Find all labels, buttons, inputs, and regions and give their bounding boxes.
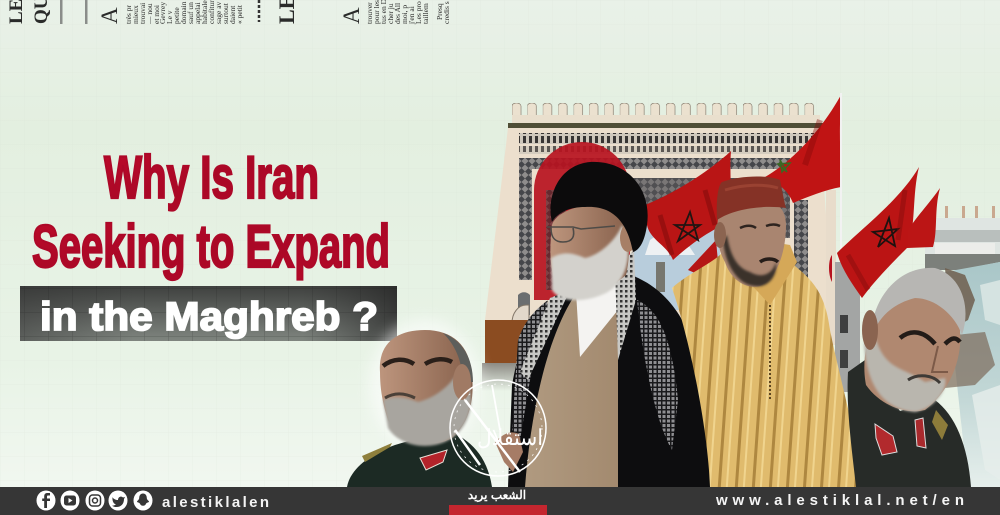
newsprint strip along the top edge: appelai — [193, 2, 202, 24]
subtitle bar: in the Maghreb ? — [40, 295, 378, 339]
newsprint strip along the top edge: habitale — [200, 0, 209, 24]
gate: Moroccan palace facade — [482, 103, 860, 392]
flag behind the turban — [645, 151, 731, 260]
newsprint strip along the top edge: Le v — [165, 10, 174, 24]
newsprint strip along the top edge: domain — [179, 1, 188, 24]
newsprint strip along the top edge: j'en ai — [407, 6, 416, 25]
newsprint strip along the top edge: mieux — [131, 5, 140, 24]
newsprint strip along the top edge: et moi — [152, 5, 161, 24]
Moroccan flags — [645, 93, 940, 298]
newsprint strip along the top edge: Gevrey — [158, 2, 167, 24]
newsprint strip along the top edge: petite — [172, 7, 181, 24]
newsprint strip along the top edge: A — [339, 7, 364, 24]
newsprint strip along the top edge: credis s — [442, 1, 451, 24]
newsprint strip along the top edge: daient — [228, 5, 237, 24]
newsprint strip along the top edge: trouver — [365, 2, 374, 24]
title: first two lines — [32, 144, 390, 280]
newsprint strip along the top edge — [6, 0, 451, 25]
newsprint strip along the top edge: moi, p — [400, 5, 409, 24]
newsprint strip along the top edge: très pr — [124, 5, 133, 24]
handle: alestiklalen — [162, 494, 269, 511]
newsprint strip along the top edge: « petit — [235, 4, 244, 24]
social icons — [36, 490, 152, 510]
title: first two lines: Seeking to Expand — [32, 213, 390, 280]
newsprint strip along the top edge: Les pro — [414, 1, 423, 24]
newsprint strip along the top edge: — nou — [145, 3, 154, 25]
subtitle bar — [20, 286, 397, 341]
logo: watermark seal — [450, 380, 546, 476]
coastal scene at the right — [925, 206, 1000, 487]
newsprint strip along the top edge: cher ju — [386, 3, 395, 24]
newsprint strip along the top edge: trouvai — [138, 3, 147, 24]
newsprint strip along the top edge: A — [97, 7, 122, 24]
figure: right commander — [848, 268, 971, 487]
newsprint strip along the top edge: sauf un — [186, 2, 195, 24]
slogan: الشعب يريد — [468, 488, 526, 503]
newsprint strip along the top edge: confitur — [207, 0, 216, 24]
footer bar — [0, 487, 1000, 515]
newsprint strip along the top edge: surtout — [221, 2, 230, 24]
flag above the right figure — [837, 167, 919, 298]
figure: left commander — [347, 319, 492, 487]
newsprint strip along the top edge: sage av — [214, 1, 223, 24]
website: www.alestiklal.net/en — [715, 492, 964, 509]
figure: centre cleric — [495, 162, 712, 487]
logo: watermark seal: استقلال — [477, 425, 543, 450]
newsprint strip along the top edge: pour les — [372, 0, 381, 24]
small flag behind the king — [688, 240, 718, 273]
narrow flag far right — [907, 188, 940, 248]
newsprint strip along the top edge: taillem — [421, 3, 430, 24]
newsprint strip along the top edge: des All — [393, 3, 402, 24]
red accent tab — [449, 505, 547, 515]
newsprint strip along the top edge: Presq — [435, 3, 444, 20]
tall flag upper right — [765, 93, 842, 253]
figure: king in yellow robe — [672, 176, 862, 487]
title: first two lines: Why Is Iran — [104, 144, 319, 211]
